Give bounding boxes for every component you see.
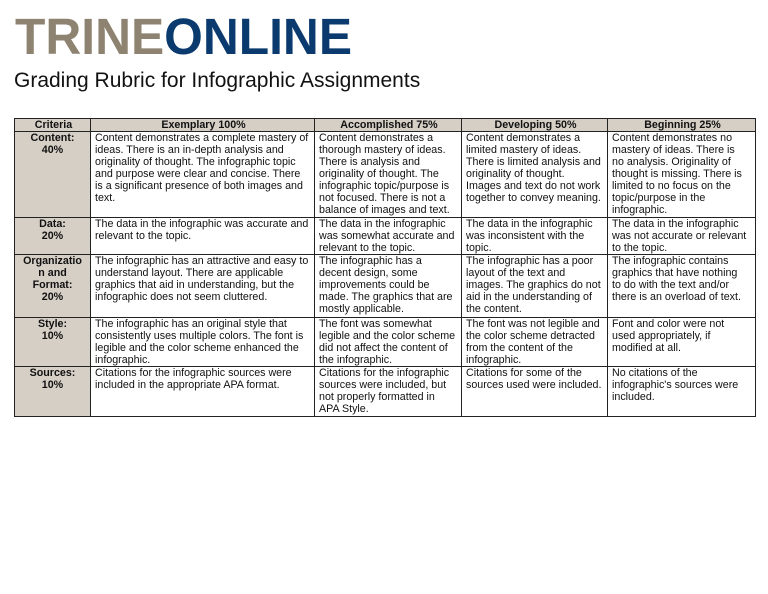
rubric table: topic/purpose in the [612, 192, 705, 204]
rubric table: originality of thought. The infographic topic [95, 156, 296, 168]
rubric table: relevant to the topic. [319, 242, 415, 254]
rubric table: infographic. [95, 354, 150, 366]
rubric table: Citations for some of the [466, 367, 582, 379]
rubric table [14, 118, 756, 417]
rubric table: The data in the infographic was accurate and [95, 218, 308, 230]
rubric table: improvements could be [319, 279, 430, 291]
rubric table: graphics that aid in understanding, but the [95, 279, 294, 291]
rubric table: infographic's sources were [612, 379, 738, 391]
rubric table: No citations of the [612, 367, 698, 379]
rubric table: The infographic has a [319, 255, 422, 267]
rubric table: infographic. [612, 204, 667, 216]
rubric table: The infographic has an original style that [95, 318, 287, 330]
rubric table: Citations for the infographic sources were [95, 367, 292, 379]
rubric table: balance of images and text. [319, 204, 450, 216]
rubric table: no analysis. Originality of [612, 156, 731, 168]
rubric table: was not accurate or relevant [612, 230, 746, 242]
rubric table: Organizatio [23, 255, 82, 267]
rubric table: infographic. [466, 354, 521, 366]
rubric table: legible and the color scheme enhanced the [95, 342, 299, 354]
rubric table: the infographic. [319, 354, 392, 366]
rubric table: originality of thought. [466, 168, 565, 180]
rubric table: 10% [42, 379, 63, 391]
rubric table: included in the appropriate APA format. [95, 379, 280, 391]
rubric table: decent design, some [319, 267, 418, 279]
rubric table: The infographic has an attractive and easy to [95, 255, 308, 267]
rubric table: not properly formatted in [319, 391, 435, 403]
rubric table: Content demonstrates a [319, 132, 433, 144]
rubric table: Data: [39, 218, 66, 230]
rubric table: The infographic has a poor [466, 255, 593, 267]
rubric table: together to convey meaning. [466, 192, 601, 204]
rubric table: 10% [42, 330, 63, 342]
rubric table: ideas. There is an in-depth analysis and [95, 144, 284, 156]
rubric table: mostly applicable. [319, 303, 404, 315]
rubric table: Images and text do not work [466, 180, 600, 192]
rubric table: legible and the color scheme [319, 330, 455, 342]
rubric table: graphics that have nothing [612, 267, 737, 279]
rubric table: originality of thought. The [319, 168, 439, 180]
rubric table: aid in the understanding of [466, 291, 592, 303]
rubric table: 40% [42, 144, 63, 156]
rubric table: text. [95, 192, 115, 204]
rubric table: modified at all. [612, 342, 681, 354]
rubric table: was somewhat accurate and [319, 230, 454, 242]
rubric table: The infographic contains [612, 255, 728, 267]
rubric table: There is limited analysis and [466, 156, 601, 168]
rubric table: was inconsistent with the [466, 230, 584, 242]
rubric table: to the topic. [612, 242, 667, 254]
rubric table: did not affect the content of [319, 342, 448, 354]
rubric table: Exemplary 100% [161, 119, 246, 131]
rubric table: the content. [466, 303, 522, 315]
rubric table: The font was somewhat [319, 318, 432, 330]
rubric table: used appropriately, if [612, 330, 710, 342]
rubric table: thought is missing. There is [612, 168, 742, 180]
rubric table: relevant to the topic. [95, 230, 191, 242]
title: Grading Rubric for Infographic Assignments [14, 69, 420, 92]
rubric table: to do with the text and/or [612, 279, 729, 291]
rubric table: Style: [38, 318, 67, 330]
rubric table: mastery of ideas. There is [612, 144, 735, 156]
rubric table: The data in the infographic [466, 218, 593, 230]
rubric table: Beginning 25% [644, 119, 721, 131]
rubric table: understand layout. There are applicable [95, 267, 283, 279]
rubric table: 20% [42, 291, 63, 303]
rubric table: sources were included, but [319, 379, 446, 391]
rubric table: Sources: [30, 367, 75, 379]
rubric table: n and [38, 267, 67, 279]
rubric table: Format: [33, 279, 72, 291]
rubric table: Content demonstrates no [612, 132, 732, 144]
rubric table: not focused. There is not a [319, 192, 445, 204]
rubric table: there is an overload of text. [612, 291, 741, 303]
rubric table: consistently uses multiple colors. The font is [95, 330, 303, 342]
rubric table: included. [612, 391, 655, 403]
rubric table: Criteria [35, 119, 72, 131]
rubric table: limited mastery of ideas. [466, 144, 581, 156]
rubric table: Content: [31, 132, 74, 144]
rubric table: The data in the infographic [319, 218, 446, 230]
rubric table: thorough mastery of ideas. [319, 144, 446, 156]
rubric table: sources used were included. [466, 379, 601, 391]
rubric table: the color scheme detracted [466, 330, 595, 342]
rubric table: Content demonstrates a [466, 132, 580, 144]
rubric table: Accomplished 75% [340, 119, 438, 131]
rubric table: Citations for the infographic [319, 367, 449, 379]
rubric table: is a significant presence of both images and [95, 180, 303, 192]
rubric table: 20% [42, 230, 63, 242]
rubric table: limited to no focus on the [612, 180, 731, 192]
rubric table: from the content of the [466, 342, 573, 354]
rubric table: Font and color were not [612, 318, 724, 330]
rubric table: topic. [466, 242, 492, 254]
rubric table: There is analysis and [319, 156, 420, 168]
rubric table: The font was not legible and [466, 318, 600, 330]
rubric table: images. The graphics do not [466, 279, 601, 291]
rubric table: infographic topic/purpose is [319, 180, 449, 192]
rubric table: Developing 50% [495, 119, 576, 131]
rubric table: made. The graphics that are [319, 291, 452, 303]
rubric table: APA Style. [319, 403, 369, 415]
rubric table: Content demonstrates a complete mastery of [95, 132, 308, 144]
rubric table: The data in the infographic [612, 218, 739, 230]
rubric table: layout of the text and [466, 267, 565, 279]
rubric table: infographic does not seem cluttered. [95, 291, 267, 303]
rubric table: and purpose were clear and concise. There [95, 168, 300, 180]
